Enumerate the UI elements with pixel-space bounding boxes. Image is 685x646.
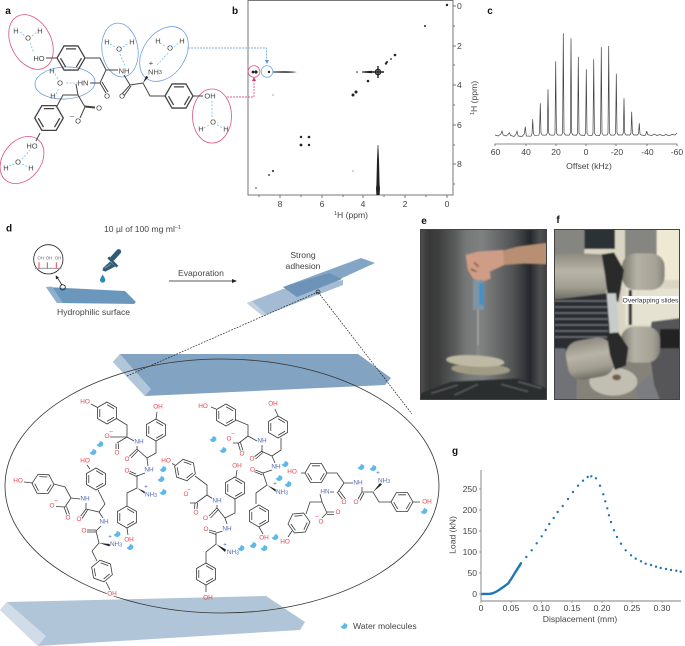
- molecule 1: NH: [134, 438, 144, 446]
- icon: surface magnifier: OH: [46, 256, 52, 261]
- atom labels: O: [167, 44, 173, 52]
- molecule 5: HO: [280, 538, 290, 546]
- molecule 5: –: [315, 514, 319, 520]
- upper casting: [555, 230, 658, 258]
- x tick labels: 0.25: [624, 603, 641, 613]
- axes: [481, 470, 681, 601]
- molecule 4: O: [203, 515, 208, 522]
- blue connector: [188, 48, 273, 77]
- lower clamp: [607, 332, 628, 370]
- big ellipse: [5, 359, 439, 613]
- finger shadow: [471, 262, 479, 272]
- molecule 2: 3: [119, 542, 122, 548]
- legend: water molecules: Water molecules: [353, 621, 417, 631]
- rings: [287, 464, 420, 537]
- rings: [171, 457, 249, 592]
- upper left grip: [550, 253, 607, 299]
- plot frame: [248, 0, 456, 198]
- molecule 1: NH: [144, 466, 154, 474]
- weight plates: [446, 354, 510, 376]
- evaporation label: Evaporation: [178, 268, 224, 278]
- x axis title: H (ppm): [337, 210, 368, 220]
- panel e frame: [420, 230, 546, 400]
- wedge: [216, 544, 226, 552]
- atom labels: H: [179, 36, 185, 46]
- molecule 2: O: [82, 528, 87, 534]
- molecule 3: –: [231, 430, 235, 438]
- molecule 4: NH: [222, 526, 232, 532]
- molecule 1: O: [125, 468, 130, 474]
- atom labels: H: [37, 26, 43, 36]
- molecule 1: –: [109, 428, 113, 436]
- panel d label: d: [6, 224, 12, 234]
- zoom dashed lines: [127, 292, 412, 414]
- molecule 5: +: [376, 470, 380, 476]
- molecule 2: +: [108, 534, 112, 540]
- glass slides: [473, 280, 484, 310]
- rings: [91, 399, 170, 535]
- tick labels: 60: [491, 147, 500, 157]
- tick labels: -60: [671, 147, 683, 157]
- adhered slides: [247, 258, 375, 316]
- x tick labels: 0: [479, 603, 484, 613]
- panel g label: g: [452, 446, 458, 457]
- axis numbers: 8: [457, 159, 462, 169]
- adhesion label: adhesion: [286, 261, 321, 271]
- atom labels: O: [25, 34, 31, 42]
- axis numbers: 6: [457, 120, 462, 130]
- panel b label: b: [232, 6, 238, 17]
- molecule 4: OH: [232, 462, 242, 470]
- wedge bond: [143, 76, 148, 83]
- lower right grip: [621, 327, 660, 363]
- molecule 3: 3: [285, 490, 288, 496]
- atom labels: H: [198, 124, 204, 134]
- ellipses: hydroxyl water sites: [0, 7, 231, 192]
- tick labels: 40: [521, 147, 531, 157]
- atom labels: O: [116, 44, 122, 54]
- y tick labels: 200: [463, 505, 477, 515]
- atom labels: 3: [159, 70, 162, 76]
- axis numbers: 2: [457, 41, 462, 51]
- panel a label: a: [5, 6, 11, 17]
- molecule 2: NH: [99, 518, 109, 526]
- axis: [495, 144, 677, 146]
- x tick labels: 0.30: [654, 603, 671, 613]
- molecule 3: O: [240, 450, 245, 458]
- molecule 2: O: [66, 514, 71, 522]
- molecule 4: OH: [203, 594, 213, 602]
- disc: [589, 368, 637, 396]
- ellipses: amine water sites: [34, 17, 198, 101]
- molecule 4: [161, 457, 249, 602]
- icon: surface magnifier: OH: [37, 256, 44, 261]
- atom labels: O: [104, 92, 110, 100]
- axis numbers: 4: [457, 80, 462, 90]
- molecule 1: [80, 398, 170, 544]
- molecule 2: O: [50, 502, 55, 510]
- icon: surface magnifier: [34, 245, 65, 290]
- x tick labels: 0.15: [564, 603, 581, 613]
- labels: HO: [287, 468, 297, 476]
- tick labels: -40: [641, 147, 654, 157]
- atom labels: NH: [119, 66, 129, 76]
- atom labels: [3, 26, 229, 172]
- molecule 3: O: [227, 436, 232, 442]
- molecule 3: +: [273, 480, 277, 488]
- lower table: [650, 317, 679, 399]
- concentration label: 10 µl of 100 mg ml: [104, 224, 175, 234]
- sparse data points: [525, 475, 682, 573]
- panel c: spectrum: [491, 33, 683, 171]
- dense data points: [482, 563, 521, 594]
- wedge: [267, 485, 277, 492]
- panel d: upper large slide: [113, 354, 391, 396]
- axis numbers: 4: [361, 199, 366, 209]
- ribbed panel: [550, 293, 610, 352]
- wedge: [373, 483, 382, 492]
- molecule 5: NH: [353, 480, 363, 486]
- concentration label: –1: [175, 225, 181, 231]
- axis numbers: [278, 1, 462, 209]
- atom labels: H: [155, 36, 161, 46]
- molecule bonds: [35, 46, 203, 141]
- molecule 5: NH: [378, 478, 387, 484]
- molecule 4: +: [223, 542, 227, 548]
- atom labels: O: [210, 118, 216, 126]
- molecule 1: OH: [124, 536, 134, 544]
- x tick labels: 0.05: [503, 603, 520, 613]
- y tick labels: 150: [463, 526, 477, 536]
- dark window: [583, 230, 616, 250]
- atom labels: H: [50, 92, 56, 100]
- axis numbers: 2: [403, 199, 408, 209]
- floor highlights: [431, 382, 541, 395]
- molecule 5: O: [319, 518, 324, 526]
- molecule 3: NH: [276, 489, 285, 496]
- atom labels: O: [15, 158, 21, 166]
- hand: [466, 250, 504, 282]
- molecule 2: [13, 458, 122, 598]
- molecule 2: O: [77, 516, 82, 523]
- molecule 3: NH: [257, 438, 267, 444]
- speckled plate: [636, 376, 660, 399]
- atom labels: O: [96, 104, 102, 112]
- string: [476, 310, 479, 348]
- x tick labels: 0.10: [533, 603, 550, 613]
- axis numbers: 0: [445, 199, 450, 209]
- molecule 2: OH: [107, 590, 117, 598]
- atom labels: O: [75, 116, 81, 126]
- axis numbers: 8: [278, 199, 283, 209]
- lower left grip: [565, 336, 614, 380]
- adhesion label: Strong: [290, 250, 316, 260]
- labels: HO: [80, 398, 90, 406]
- atom labels: HO: [26, 142, 38, 150]
- molecule 5: O: [342, 499, 347, 506]
- panel f: photo of testing machine: [555, 230, 679, 399]
- atom labels: H: [129, 38, 135, 46]
- diagonal star peak: [372, 66, 384, 78]
- atom labels: H: [223, 124, 229, 134]
- molecule 5: [280, 464, 432, 546]
- y tick labels: 0: [472, 589, 477, 599]
- hydrophilic slide: [46, 286, 136, 304]
- x tick labels: 0.20: [594, 603, 611, 613]
- molecule 4: O: [194, 510, 199, 516]
- panel d: preparation steps: [34, 224, 375, 317]
- tick labels: 0: [584, 147, 589, 157]
- molecule 4: 3: [236, 550, 239, 556]
- atom labels: OH: [204, 92, 216, 100]
- background cream wall: [656, 230, 679, 280]
- arm: [501, 242, 551, 265]
- molecule 1: 3: [154, 493, 157, 499]
- atom labels: O: [119, 92, 125, 100]
- panel e: photo of hanging weight: [421, 230, 546, 399]
- atom labels: O: [57, 78, 63, 88]
- x axis title: 1: [334, 211, 337, 217]
- molecule 1: +: [144, 484, 148, 490]
- dark post: [629, 290, 632, 325]
- y axis title: 1: [470, 112, 476, 115]
- atom labels: –: [70, 111, 75, 120]
- slide label: Hydrophilic surface: [57, 307, 130, 317]
- y tick labels: 100: [463, 547, 477, 557]
- molecule 5: OH: [422, 498, 432, 506]
- molecule 1: O: [115, 450, 120, 456]
- y tick labels: 250: [463, 484, 477, 494]
- upper right grip: [622, 253, 665, 290]
- spectrum trace: [495, 33, 677, 136]
- molecule 3: O: [250, 466, 255, 474]
- labels: HO: [13, 478, 23, 484]
- molecule 2: –: [54, 498, 58, 504]
- background shelf: [625, 288, 683, 325]
- icon: surface magnifier: OH: [55, 256, 61, 261]
- x axis title: Displacement (mm): [543, 614, 617, 624]
- atom labels: H: [104, 38, 110, 46]
- rings: [24, 465, 116, 590]
- molecule 3: [198, 400, 292, 542]
- atom labels: H: [3, 164, 9, 172]
- molecule 4: O: [184, 491, 189, 498]
- molecule 4: O: [204, 526, 209, 533]
- wedge: [137, 488, 147, 494]
- molecule 1: O: [125, 456, 130, 463]
- hook: [477, 345, 479, 355]
- evaporation arrow: [169, 279, 237, 283]
- tick marks: [479, 489, 662, 603]
- y axis title: Load (kN): [448, 516, 458, 554]
- wedge: [99, 543, 110, 546]
- panel b: 2D NMR plot: [188, 0, 479, 220]
- molecule 2: NH: [80, 496, 90, 502]
- x tick labels: [479, 603, 671, 613]
- icon: dropper: [100, 252, 119, 283]
- molecule 3: OH: [259, 534, 269, 542]
- atom labels: H: [49, 66, 55, 76]
- y tick labels: [463, 484, 477, 599]
- y tick labels: 50: [467, 568, 477, 578]
- panel e label: e: [421, 216, 427, 227]
- atom labels: H: [13, 26, 19, 36]
- panel a: molecule with water: [0, 7, 231, 192]
- panel f frame: [554, 230, 680, 400]
- correlation peaks: [252, 4, 448, 195]
- atom labels: H: [28, 164, 34, 172]
- water molecule icons: [90, 436, 427, 551]
- lower left base: [555, 348, 578, 399]
- axis title: Offset (kHz): [566, 161, 612, 171]
- molecule 2: HO: [80, 458, 90, 464]
- tick labels: -20: [611, 147, 623, 157]
- molecule 5: HN: [320, 488, 330, 496]
- pink connector: [227, 66, 260, 97]
- hydrogen bonds: [9, 32, 223, 167]
- molecule 3: OH: [268, 400, 278, 408]
- panel d: lower large slide: [0, 596, 305, 646]
- panel g: load-displacement chart: [448, 470, 682, 624]
- labels: HO: [198, 403, 208, 410]
- axis numbers: 0: [457, 1, 462, 11]
- floor: [421, 378, 546, 399]
- labels: HO: [161, 458, 171, 464]
- y axis title: H (ppm): [469, 81, 479, 112]
- upper clamp: [602, 252, 624, 302]
- molecule 3: O: [250, 456, 255, 462]
- atom labels: HN: [78, 78, 88, 88]
- molecule 5: O: [354, 499, 359, 506]
- panel f label: f: [556, 215, 560, 226]
- atom labels: NH: [148, 68, 159, 76]
- atom labels: +: [149, 58, 154, 68]
- axis numbers: 6: [320, 199, 325, 209]
- molecule 1: NH: [145, 492, 154, 498]
- molecule 3: NH: [271, 464, 281, 470]
- panel c label: c: [487, 6, 493, 17]
- glass slides: [607, 293, 619, 333]
- atom labels: HO: [33, 54, 45, 63]
- molecule 4: NH: [212, 498, 222, 504]
- base casting: [576, 360, 654, 399]
- molecule 4: –: [187, 486, 191, 494]
- molecule 5: O: [336, 509, 341, 516]
- black block: [660, 328, 679, 349]
- rings: [211, 401, 292, 534]
- molecule 5: 3: [387, 479, 390, 485]
- tick labels: [491, 147, 683, 157]
- molecule 4: NH: [227, 549, 236, 556]
- molecule 1: O: [105, 433, 110, 440]
- bolt: [612, 374, 621, 380]
- molecule 2: NH: [110, 541, 119, 548]
- tick labels: 20: [551, 147, 561, 157]
- overlapping slides label: Overlapping slides: [623, 298, 679, 304]
- molecule 1: OH: [153, 404, 163, 410]
